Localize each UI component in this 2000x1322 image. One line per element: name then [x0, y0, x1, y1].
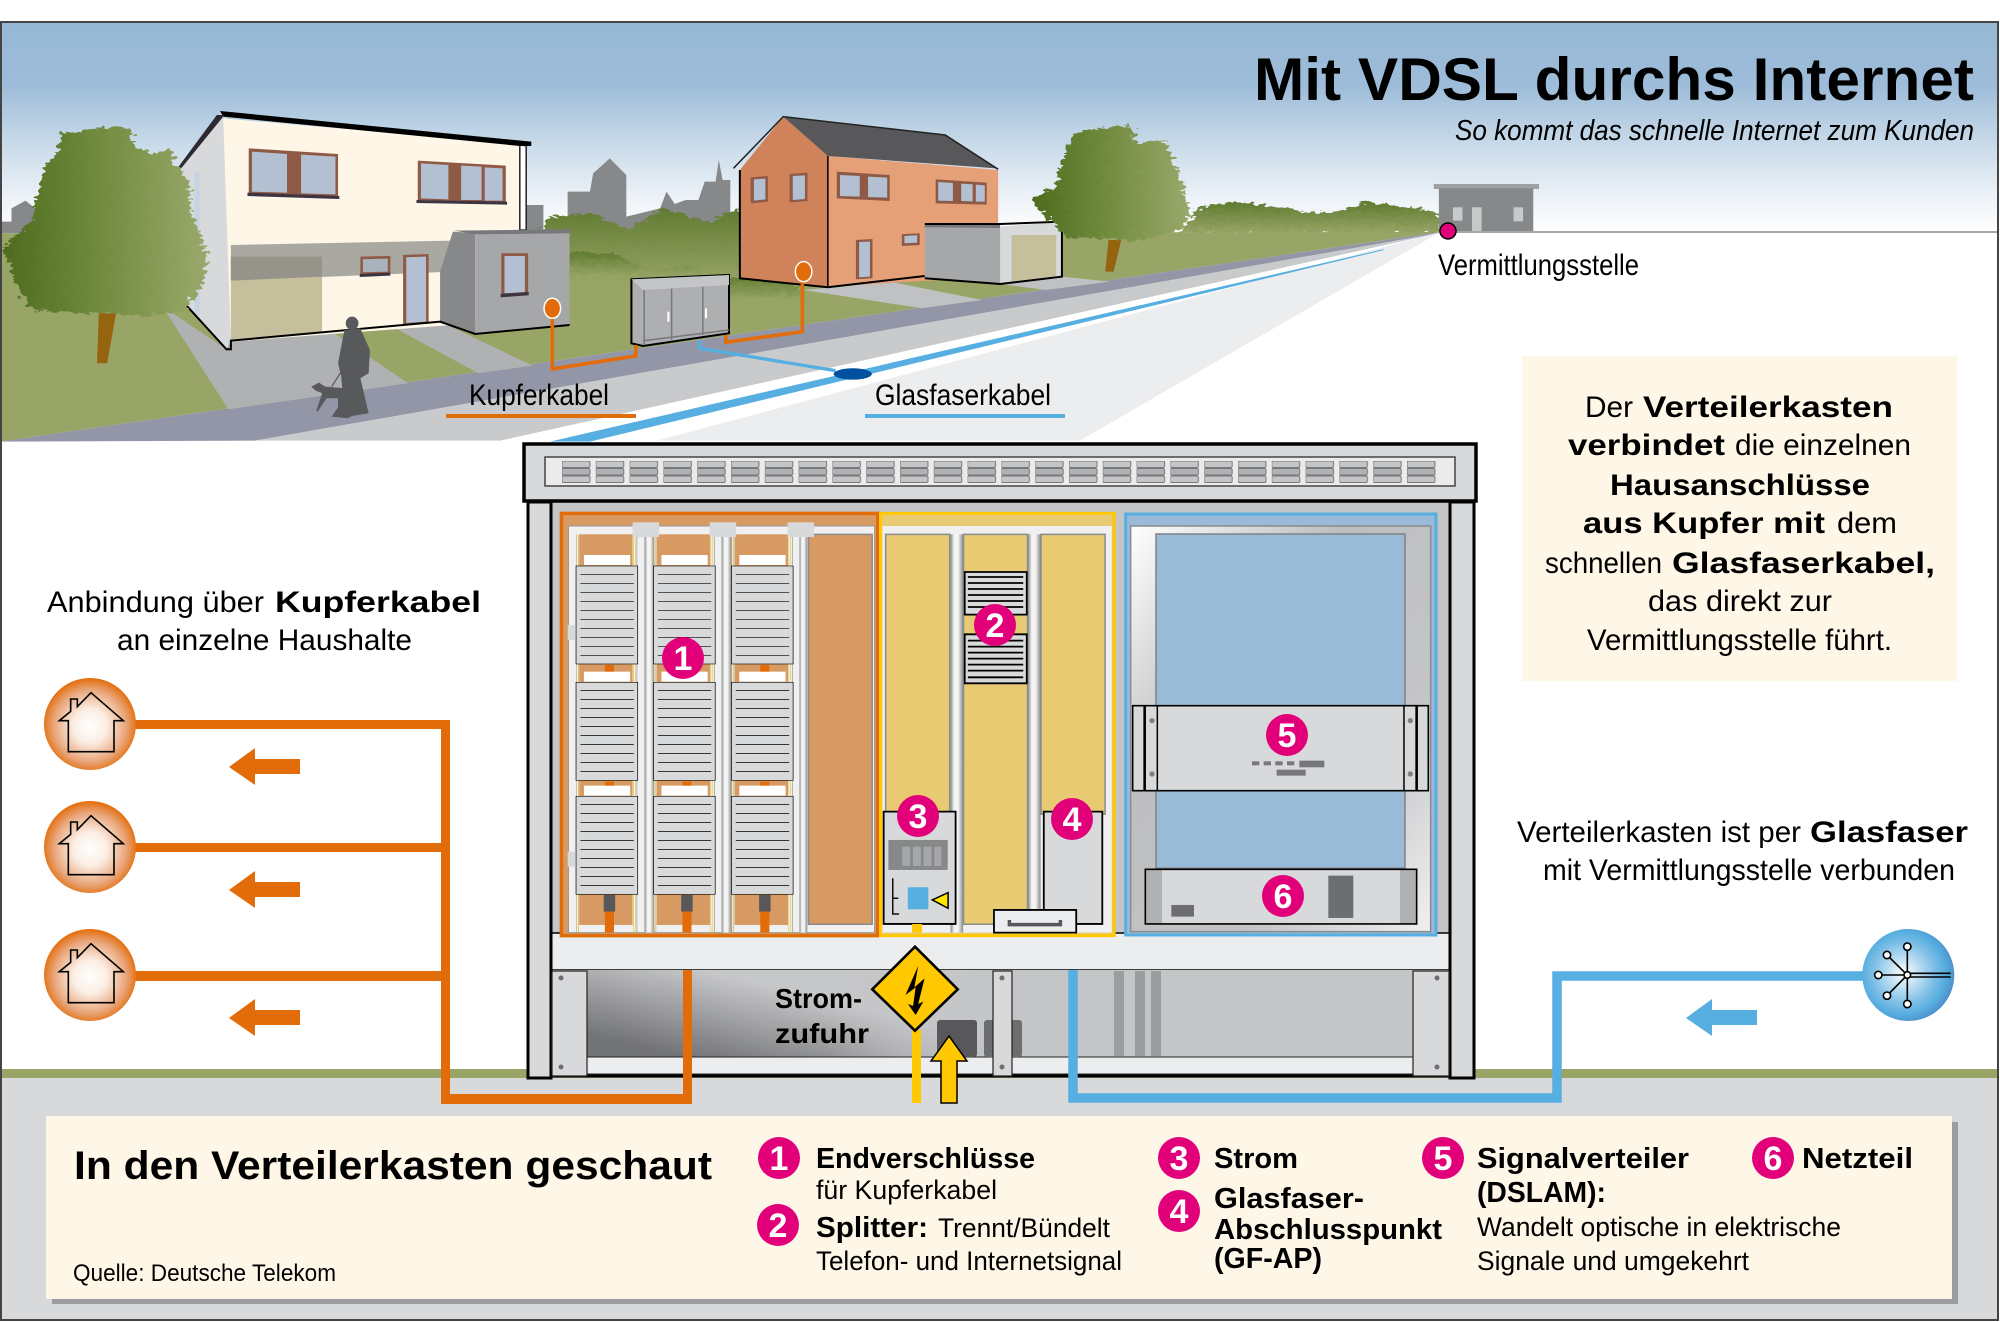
legend item 1: [758, 1137, 1035, 1205]
label: Stromzufuhr: zufuhr: [775, 1018, 869, 1049]
legend item 6: [1752, 1137, 1913, 1179]
source: Quelle: Deutsche Telekom: [73, 1260, 336, 1287]
callout: Verteilerkasten: Verteilerkasten: [1643, 391, 1893, 424]
copper cables: [552, 272, 802, 369]
callout: Verteilerkasten: das direkt zur: [1648, 585, 1832, 618]
fibre branch: [700, 340, 836, 371]
legend item 5: 5: [1434, 1140, 1452, 1178]
legend item 3: [1158, 1137, 1298, 1179]
number badges on the cabinet: 1: [674, 640, 692, 678]
callout: Verteilerkasten: Hausanschlüsse: [1610, 469, 1870, 502]
arrow: fibre: [1686, 999, 1757, 1036]
legend item 2: [757, 1204, 1122, 1276]
callout: Verteilerkasten: schnellen: [1545, 547, 1662, 580]
legend item 2: Telefon- und Internetsignal: [816, 1246, 1122, 1276]
legend item 4: 4: [1170, 1193, 1189, 1231]
legend item 4: [1158, 1183, 1442, 1275]
legend item 4: Glasfaser-: [1214, 1183, 1364, 1215]
road and pavement: [0, 232, 1440, 442]
lower beam: [551, 933, 1450, 970]
cabinet interior: [551, 502, 1450, 933]
legend item 4: (GF-AP): [1214, 1243, 1322, 1275]
number badges on the cabinet: 6: [1274, 878, 1292, 916]
lower compartment: [551, 970, 1450, 1076]
legend item 1: 1: [770, 1140, 788, 1178]
legend heading: In den Verteilerkasten geschaut: [74, 1144, 712, 1188]
legend item 6: Netzteil: [1802, 1143, 1913, 1175]
heading: Glasfaser-Anbindung: [1517, 816, 1968, 887]
label: Stromzufuhr: [775, 983, 869, 1049]
callout: Verteilerkasten: Der: [1585, 391, 1633, 424]
orange and yellow compartments: [561, 513, 1114, 936]
side posts: [528, 502, 1474, 1078]
label: Vermittlungsstelle: Vermittlungsstelle: [1438, 249, 1639, 282]
power supply unit: [1145, 869, 1417, 924]
legend item 1: Endverschlüsse: [816, 1143, 1035, 1175]
number badges on the cabinet: 5: [1278, 717, 1296, 755]
callout: Verteilerkasten: [1522, 356, 1957, 681]
legend item 4: Abschlusspunkt: [1214, 1214, 1442, 1246]
heading: Glasfaser-Anbindung: Verteilerkasten ist per: [1517, 816, 1801, 849]
title: Mit VDSL durchs Internet: [1254, 46, 1974, 113]
number badges on the cabinet: 2: [986, 607, 1004, 645]
household icon 3: [44, 929, 136, 1021]
top cap with vents: [524, 444, 1476, 501]
ground band: [1, 1069, 1998, 1320]
house left: [177, 111, 570, 349]
heading: Anbindung: an einzelne Haushalte: [117, 624, 412, 657]
garage: [925, 222, 1062, 284]
street cabinet: [631, 275, 729, 346]
ground: [0, 232, 1440, 442]
copper connection points: [544, 262, 812, 318]
exchange connection icon: [1862, 929, 1954, 1021]
legend item 5: [1422, 1137, 1841, 1276]
household icon 2: [44, 801, 136, 893]
arrow: copper 1: [229, 748, 300, 785]
tree right: [1032, 125, 1190, 272]
legend item 1: für Kupferkabel: [816, 1175, 997, 1205]
signal distributor unit: [1133, 706, 1428, 791]
legend item 5: (DSLAM):: [1477, 1177, 1606, 1209]
legend item 2: Splitter:: [816, 1212, 928, 1244]
warning diamond: [872, 947, 958, 1031]
callout: Verteilerkasten: Vermittlungsstelle führt.: [1587, 624, 1892, 657]
exchange building: [1434, 184, 1539, 232]
street scene illustration: [0, 111, 1539, 442]
number badges on the cabinet: 3: [909, 798, 927, 836]
label: Glasfaserkabel: Glasfaserkabel: [875, 379, 1051, 412]
fibre cable: [1073, 970, 1870, 1098]
callout: Verteilerkasten: verbindet: [1568, 429, 1725, 462]
legend item 3: Strom: [1214, 1143, 1298, 1175]
heading: Anbindung: [47, 586, 481, 657]
horizon line: [1440, 231, 1998, 233]
label: Stromzufuhr: Strom-: [775, 983, 862, 1014]
heading: Glasfaser-Anbindung: Glasfaser: [1810, 816, 1968, 849]
copper compartment: [561, 513, 878, 936]
house right: [733, 117, 998, 287]
exchange marker: [1440, 223, 1456, 239]
splitter compartment: [880, 513, 1114, 936]
legend item 5: Signalverteiler: [1477, 1143, 1689, 1175]
fibre compartment: [1126, 514, 1436, 935]
callout: Verteilerkasten: aus Kupfer mit: [1583, 507, 1825, 540]
arrow: copper 3: [229, 999, 300, 1036]
power cable: [912, 1030, 921, 1103]
legend item 5: Signale und umgekehrt: [1477, 1246, 1749, 1276]
distribution cabinet: [524, 444, 1476, 1078]
callout: Verteilerkasten: dem: [1837, 507, 1897, 540]
skyline: [0, 158, 730, 233]
legend panel: [46, 1116, 1958, 1304]
power arrow: [931, 1036, 967, 1103]
sky background: [1, 22, 1998, 232]
driveways: [163, 277, 1110, 409]
fibre node: [834, 368, 872, 380]
legend item 2: 2: [769, 1207, 787, 1245]
household icon 1: [44, 678, 136, 770]
hills: [536, 202, 1440, 300]
callout: Verteilerkasten: Glasfaserkabel,: [1672, 547, 1935, 580]
callout: Verteilerkasten: die einzelnen: [1735, 429, 1911, 462]
arrow: copper 2: [229, 871, 300, 908]
heading: Glasfaser-Anbindung: mit Vermittlungsstelle verbunden: [1543, 854, 1955, 887]
tree left: [3, 127, 207, 363]
legend item 5: Wandelt optische in elektrische: [1477, 1212, 1841, 1242]
heading: Anbindung: Kupferkabel: [275, 586, 481, 619]
number badges on the cabinet: 4: [1063, 801, 1082, 839]
heading: Anbindung: Anbindung über: [47, 586, 264, 619]
label: Kupferkabel: Kupferkabel: [469, 379, 609, 412]
copper cable network: [135, 720, 692, 1104]
number badges on the cabinet: [662, 604, 1308, 917]
person with dog: [311, 317, 370, 418]
legend item 2: Trennt/Bündelt: [938, 1213, 1110, 1243]
legend item 3: 3: [1170, 1140, 1188, 1178]
legend item 6: 6: [1764, 1140, 1782, 1178]
lower brackets: [552, 971, 1449, 1076]
